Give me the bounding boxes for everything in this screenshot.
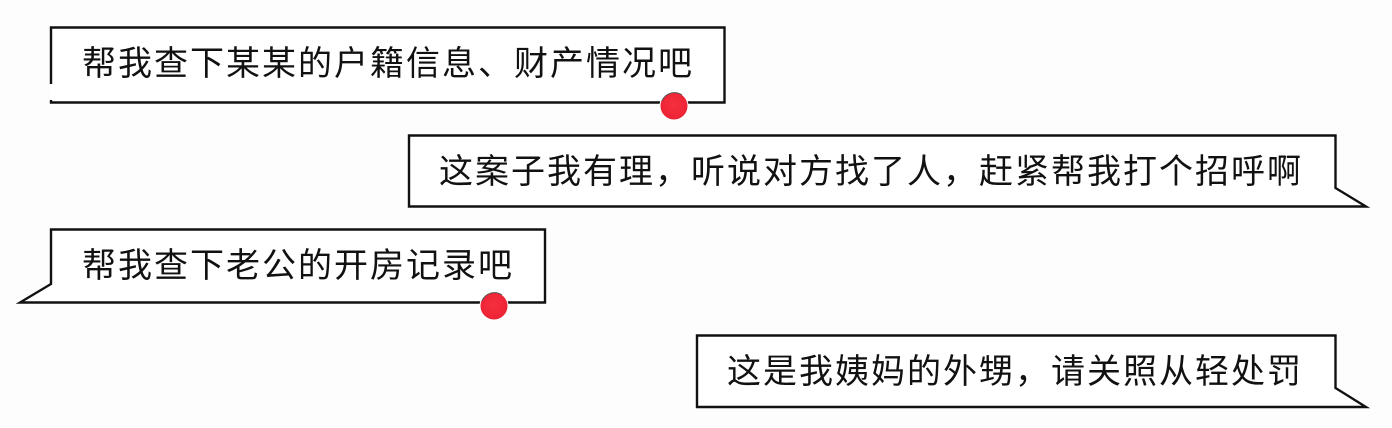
speech bubble 2	[409, 136, 1366, 206]
bubble 2 text: 这案子我有理，听说对方找了人，赶紧帮我打个招呼啊	[439, 153, 1303, 191]
bubble 3 text: 帮我查下老公的开房记录吧	[82, 247, 514, 285]
bubble 1 outline	[51, 28, 724, 102]
bubble 1 red dot	[660, 92, 688, 120]
bubble 3 red dot	[480, 292, 508, 320]
bubble 4 outline	[697, 336, 1366, 407]
bubble 3 outline	[20, 230, 545, 302]
bubble 1 text: 帮我查下某某的户籍信息、财产情况吧	[82, 45, 694, 83]
bubble 4 text: 这是我姨妈的外甥，请关照从轻处罚	[727, 353, 1303, 391]
speech bubble 4	[697, 336, 1366, 407]
speech bubble 3	[20, 230, 545, 320]
bubble 2 outline	[409, 136, 1366, 206]
speech bubble 1	[51, 28, 724, 120]
